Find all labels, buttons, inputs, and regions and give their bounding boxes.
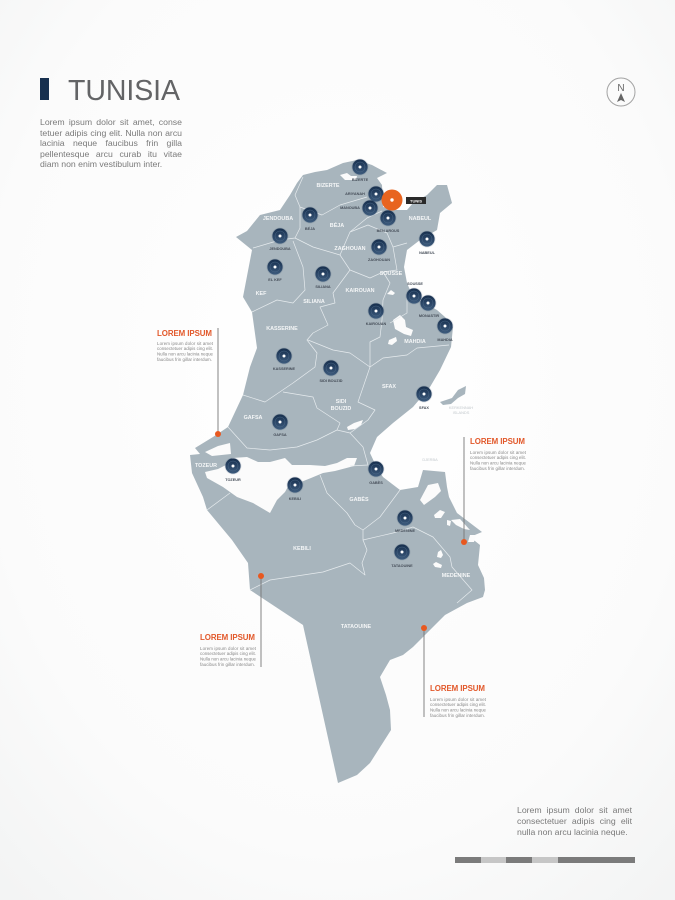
region labels: SFAX: [382, 384, 396, 390]
capital marker: Tunis: [382, 190, 426, 210]
intro text block: [40, 117, 182, 169]
city markers: JENDOUBA: [269, 247, 291, 251]
callout: south-east: Nulla non arcu lacinia neque: [430, 708, 487, 712]
region labels: [195, 183, 473, 630]
region labels: KEF: [256, 291, 267, 297]
callout: south-east: consectetuer adipis cing elit.: [430, 702, 486, 707]
city markers: NABEUL: [419, 251, 436, 255]
callout: south-east: LOREM IPSUM: [430, 684, 485, 693]
city markers: ZAGHOUAN: [368, 258, 390, 262]
note text block: [517, 805, 632, 837]
city markers: BÉJA: [305, 226, 315, 231]
intro text block: tetuer adipis cing elit. Nulla non arcu: [40, 128, 182, 138]
callout: east: faucibus frin gillar interdum.: [470, 466, 525, 471]
region labels: TATAOUINE: [341, 624, 372, 630]
city markers: BEN AROUS: [377, 229, 400, 233]
region labels: GAFSA: [244, 415, 263, 421]
region labels: KAIROUAN: [345, 288, 375, 294]
region labels: TOZEUR: [195, 463, 217, 469]
region labels: KERKENNAH: [449, 405, 473, 410]
region labels: NABEUL: [409, 216, 432, 222]
callout: south-east: Lorem ipsum dolor sit amet: [430, 697, 487, 702]
callout: south-east: [421, 625, 487, 718]
island group: [440, 386, 466, 405]
city markers: SFAX: [419, 406, 429, 410]
callout: east: Nulla non arcu lacinia neque: [470, 460, 527, 466]
region labels: SIDI: [336, 399, 347, 405]
scale bar: [455, 857, 635, 863]
city markers: MONASTIR: [419, 314, 439, 318]
region labels: JENDOUBA: [263, 216, 293, 222]
callout: south-west: consectetuer adipis cing elit.: [200, 651, 256, 656]
region labels: DJERBA: [422, 457, 438, 462]
callout: north-west: faucibus frin gillar interdum.: [157, 357, 212, 362]
icon: compass: [607, 78, 635, 106]
callout: south-west: LOREM IPSUM: [200, 633, 255, 642]
city markers: SIDI BOUZID: [320, 379, 343, 383]
callout: south-west: Lorem ipsum dolor sit amet: [200, 646, 257, 651]
city markers: KASSERINE: [273, 367, 296, 371]
capital marker: Tunis: TUNIS: [410, 198, 422, 203]
region labels: ISLANDS: [453, 410, 470, 415]
region labels: SOUSSE: [380, 271, 403, 277]
note text block: Lorem ipsum dolor sit amet: [517, 805, 632, 815]
note text block: nulla non arcu lacinia neque.: [517, 827, 628, 837]
icon: compass: N: [617, 83, 625, 94]
region labels: BOUZID: [331, 406, 351, 412]
city markers: MANOUBA: [340, 206, 360, 210]
title: TUNISIA: [68, 75, 180, 107]
callout: south-west: Nulla non arcu lacinia neque: [200, 656, 257, 662]
note text block: consectetuer adipis cing elit: [517, 816, 632, 826]
callout: north-west: consectetuer adipis cing elit.: [157, 346, 213, 351]
intro text block: pellentesque arcu curab itu vitae: [40, 149, 182, 159]
city markers: BIZERTE: [352, 178, 369, 182]
map of Tunisia: [190, 159, 485, 783]
lakes and sebkhas: [205, 173, 476, 568]
callout: north-west: Lorem ipsum dolor sit amet: [157, 341, 214, 346]
region borders: [207, 177, 472, 603]
region labels: ZAGHOUAN: [334, 246, 366, 252]
city markers: ARIYANAH: [345, 192, 365, 196]
callout: east: [461, 437, 527, 545]
region labels: MEDENINE: [442, 573, 471, 579]
city markers: GAFSA: [273, 433, 287, 437]
callout: north-west: LOREM IPSUM: [157, 329, 212, 338]
callout: south-west: faucibus frin gillar interdum.: [200, 662, 255, 667]
region labels: BIZERTE: [316, 183, 340, 189]
callout: east: consectetuer adipis cing elit.: [470, 455, 526, 460]
city markers: TOZEUR: [225, 478, 241, 482]
intro text block: diam non enim vestibulum inter.: [40, 159, 162, 169]
city markers: GABÈS: [369, 480, 383, 485]
city markers: KEBILI: [289, 497, 301, 501]
region labels: MAHDIA: [404, 339, 426, 345]
region labels: GABÈS: [349, 495, 369, 503]
city markers: EL KEF: [268, 278, 282, 282]
country shape: [190, 160, 485, 783]
city markers: SOUSSE: [407, 282, 423, 286]
city markers: MEDENINE: [395, 529, 415, 533]
callout: south-west: [200, 573, 264, 667]
city markers: SILIANA: [315, 285, 331, 289]
callout: north-west: [157, 328, 221, 437]
callout: east: Lorem ipsum dolor sit amet: [470, 450, 527, 455]
callout: north-west: Nulla non arcu lacinia neque: [157, 352, 214, 356]
city markers: MAHDIA: [437, 338, 453, 342]
region labels: SILIANA: [303, 299, 325, 305]
intro text block: lacinia neque faucibus frin gilla: [40, 138, 182, 148]
region labels: BÉJA: [330, 221, 344, 229]
region labels: KASSERINE: [266, 326, 298, 332]
callout: south-east: faucibus frin gillar interdum.: [430, 713, 485, 718]
city markers: [225, 159, 453, 568]
city markers: KAIROUAN: [366, 322, 386, 326]
callout: east: LOREM IPSUM: [470, 437, 525, 446]
intro text block: Lorem ipsum dolor sit amet, conse: [40, 117, 182, 127]
city markers: TATAOUINE: [391, 564, 413, 568]
region labels: KEBILI: [293, 546, 311, 552]
